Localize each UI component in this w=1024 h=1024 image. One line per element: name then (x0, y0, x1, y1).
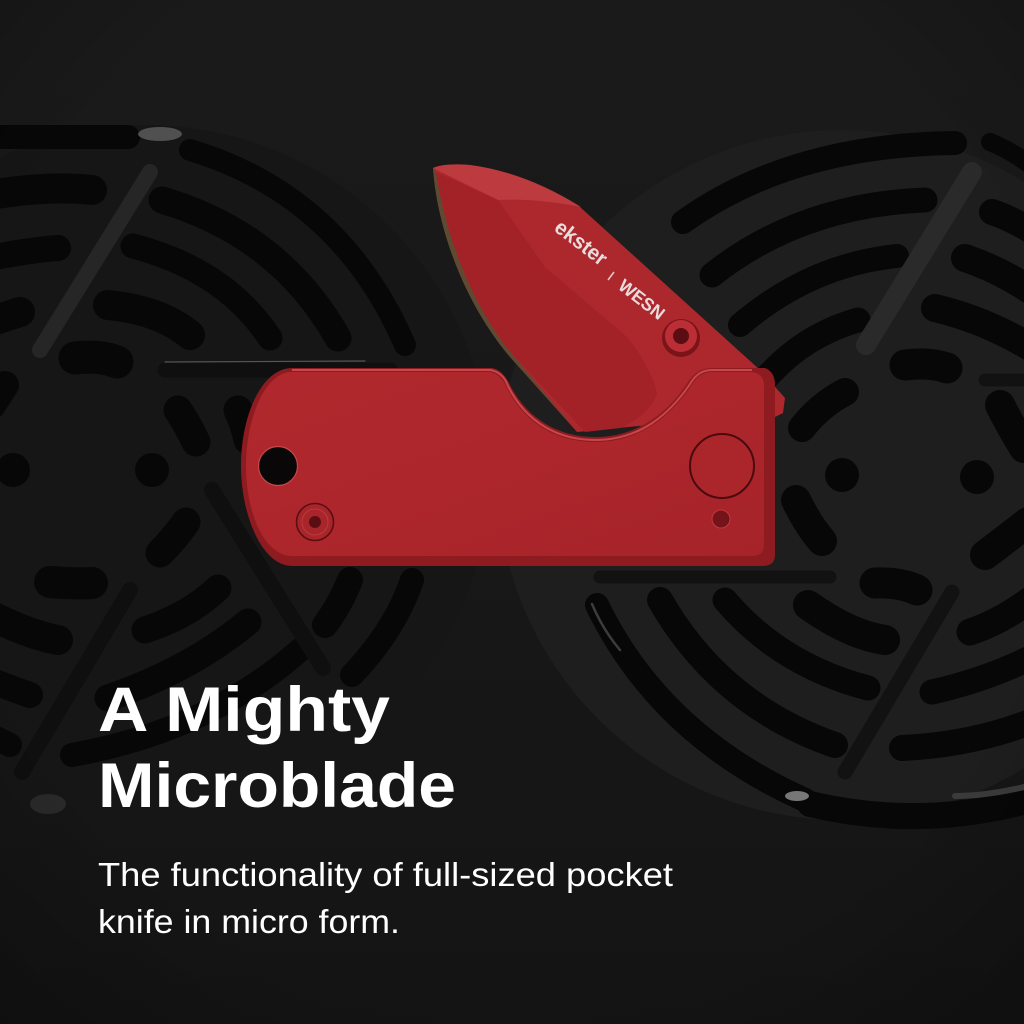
knife handle (241, 368, 775, 566)
left grill spokes (22, 127, 390, 814)
right grill plate (497, 130, 1024, 820)
blade pivot screw (662, 319, 700, 357)
blade top bevel (433, 164, 581, 207)
left grill plate (0, 125, 490, 815)
blade logo text: WESN (615, 275, 669, 324)
blade edge (433, 168, 577, 431)
right fan grill (497, 130, 1024, 820)
small pin hole (712, 510, 730, 528)
subtitle: The functionality of full-sized pocket (98, 856, 673, 893)
blade logo text (550, 216, 669, 324)
subtitle: knife in micro form. (98, 903, 400, 940)
release button (690, 434, 754, 498)
blade logo text: ekster (550, 216, 612, 270)
bright reflections (592, 604, 620, 650)
title: Microblade (98, 751, 456, 821)
handle top highlight (292, 370, 752, 440)
right grill spokes (592, 172, 1024, 801)
subtitle (98, 856, 673, 940)
blade lower flat (436, 172, 657, 432)
handle screw (296, 504, 334, 540)
lanyard hole (258, 446, 298, 486)
left fan grill (0, 125, 490, 815)
title (98, 675, 456, 821)
title: A Mighty (98, 675, 390, 745)
handle face (246, 372, 764, 556)
blade (433, 164, 785, 432)
bright highlight (138, 127, 182, 141)
knife (241, 164, 785, 566)
